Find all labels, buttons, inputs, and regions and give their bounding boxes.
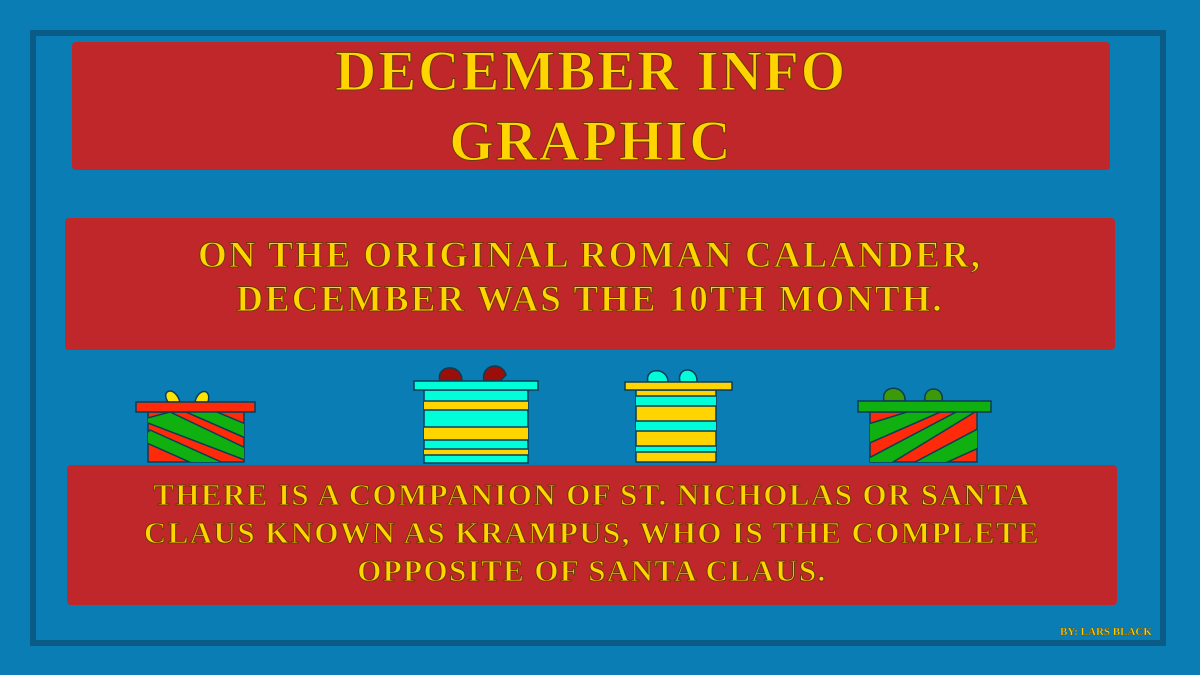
fact panel: roman calendar: [65, 218, 1115, 350]
gift 4: [858, 388, 991, 470]
fact panel: krampus: [67, 465, 1117, 605]
fact panel: krampus: CLAUS KNOWN AS KRAMPUS, WHO IS THE COMPLETE: [144, 515, 1040, 550]
gift 1: [135, 390, 256, 463]
title panel: [72, 42, 1110, 170]
gift 3: [625, 370, 732, 462]
title panel: DECEMBER INFO: [335, 40, 847, 103]
gift 2: [414, 366, 538, 463]
gifts illustration: [135, 365, 992, 464]
fact panel: roman calendar: DECEMBER WAS THE 10TH MONTH.: [236, 279, 944, 320]
fact panel: krampus: OPPOSITE OF SANTA CLAUS.: [357, 553, 827, 588]
fact panel: krampus: THERE IS A COMPANION OF ST. NICHOLAS OR SANTA: [153, 477, 1031, 512]
fact panel: roman calendar: ON THE ORIGINAL ROMAN CALANDER,: [198, 235, 982, 276]
title panel: GRAPHIC: [449, 110, 733, 173]
byline: BY: LARS BLACK: [1060, 626, 1152, 638]
